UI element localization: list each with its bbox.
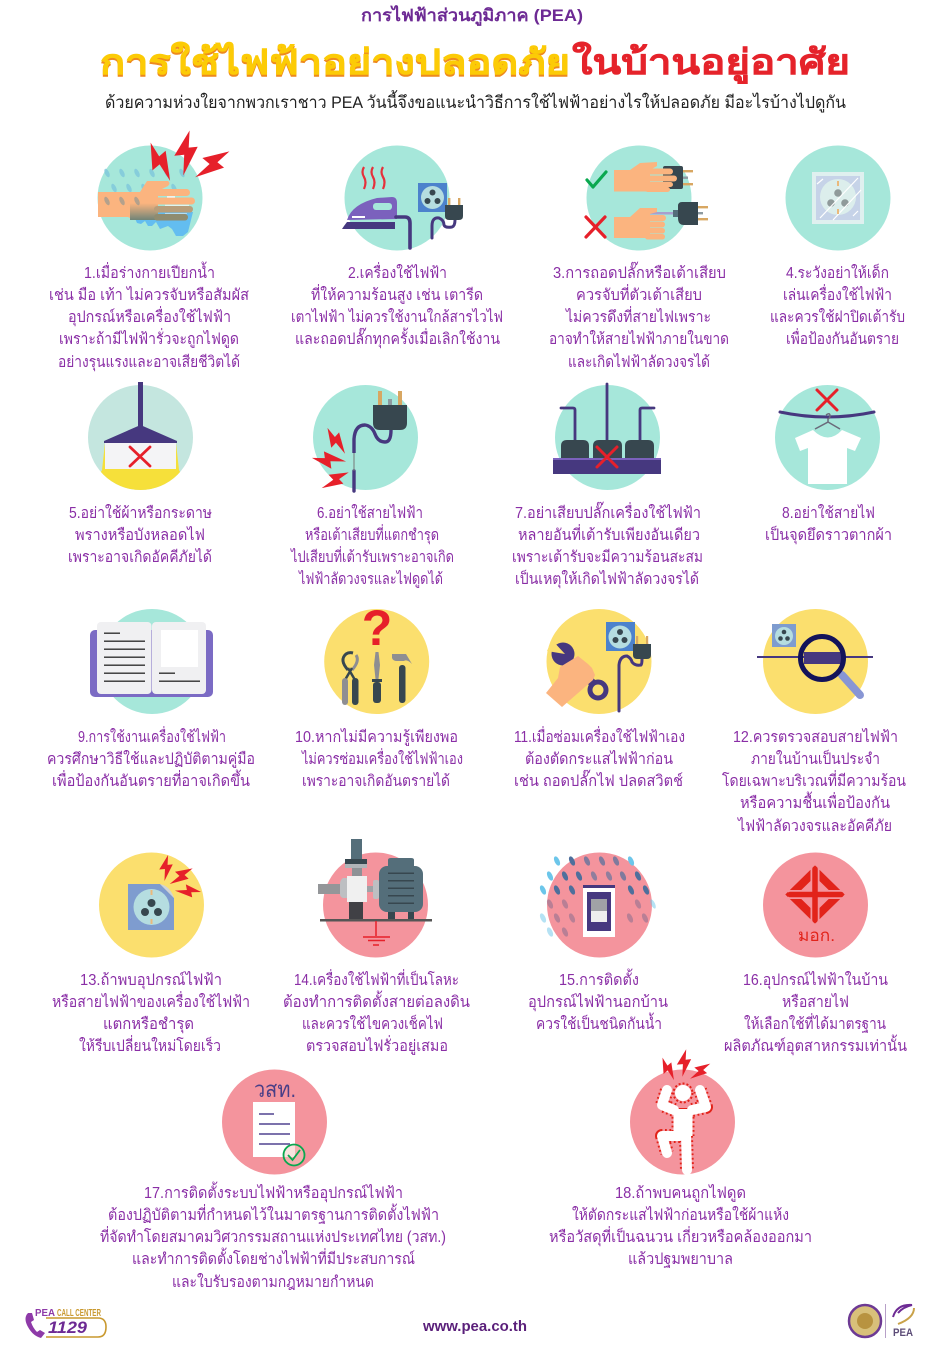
icon: EIT certified document: วสท.: [254, 1077, 296, 1102]
text: item 7: [512, 501, 703, 589]
text: item 17: และใบรับรองตามกฎหมายกำหนด: [172, 1273, 374, 1291]
text: item 16: ให้เลือกใช้ที่ได้มาตรฐาน: [744, 1013, 886, 1033]
text: item 18: หรือวัสดุที่เป็นฉนวน เกี่ยวหรือคล้องออกมา: [549, 1226, 812, 1247]
icon: person being shocked: [630, 1049, 735, 1174]
icon: covered socket: [786, 146, 890, 250]
text: item 12: ภายในบ้านเป็นประจำ: [751, 749, 880, 768]
panel: item 10 tools: [295, 600, 463, 790]
panel: item 14 grounding: [283, 839, 470, 1056]
icon: waterproof switch in rain: [539, 852, 657, 958]
text: item 2: 2.เครื่องใช้ไฟฟ้า: [348, 262, 447, 282]
text: item 14: 14.เครื่องใช้ไฟฟ้าที่เป็นโลหะ: [294, 969, 459, 989]
panel: item 3 unplugging: [549, 146, 729, 371]
text: item 15: อุปกรณ์ไฟฟ้านอกบ้าน: [528, 993, 668, 1012]
icon: wet hand with electric shock: [98, 130, 235, 250]
text: item 7: เป็นเหตุให้เกิดไฟฟ้าลัดวงจรได้: [515, 569, 699, 589]
icon: TIS standard mark: [763, 852, 868, 958]
text: item 4: 4.ระวังอย่าให้เด็ก: [786, 263, 889, 282]
text: item 11: [514, 726, 685, 790]
panel: item 8 clothesline: [765, 385, 892, 545]
text: item 17: [100, 1181, 446, 1291]
text: item 12: ไฟฟ้าลัดวงจรและอัคคีภัย: [736, 817, 892, 835]
text: item 12: หรือความชื้นเพื่อป้องกัน: [740, 791, 890, 812]
icon: shirt hung on electric wire: [775, 385, 880, 490]
panel: item 13 damaged equipment: [52, 852, 250, 1055]
text: item 6: 6.อย่าใช้สายไฟฟ้า: [317, 504, 423, 522]
text: item 4: เพื่อป้องกันอันตราย: [786, 328, 899, 348]
text: item 10: ไม่ควรซ่อมเครื่องใช้ไฟฟ้าเอง: [300, 748, 463, 768]
title: [100, 41, 850, 84]
text: item 7: 7.อย่าเสียบปลั๊กเครื่องใช้ไฟฟ้า: [515, 501, 701, 522]
icon: iron and socket: [342, 146, 463, 250]
text: item 5: [68, 504, 212, 566]
text: item 16: ผลิตภัณฑ์อุตสาหกรรมเท่านั้น: [724, 1034, 907, 1056]
panel: item 15 waterproof: [528, 852, 668, 1033]
icon: power strip with three plugs: [553, 384, 661, 490]
title: การใช้ไฟฟ้าอย่างปลอดภัย: [100, 41, 570, 82]
text: item 15: [528, 968, 668, 1033]
text: item 14: ตรวจสอบไฟรั่วอยู่เสมอ: [306, 1035, 448, 1056]
text: item 15: ควรใช้เป็นชนิดกันน้ำ: [536, 1012, 662, 1033]
icon: damaged cord and plug: [312, 385, 418, 496]
text: item 11: เช่น ถอดปลั๊กไฟ ปลดสวิตช์: [514, 769, 683, 790]
text: item 3: อาจทำให้สายไฟฟ้าภายในขาด: [549, 330, 729, 348]
text: item 2: และถอดปลั๊กทุกครั้งเมื่อเลิกใช้งาน: [295, 327, 500, 349]
text: item 9: 9.การใช้งานเครื่องใช้ไฟฟ้า: [78, 726, 226, 746]
icon: TIS standard mark: มอก.: [798, 926, 835, 945]
text: item 14: [283, 969, 470, 1056]
text: item 2: ที่ให้ความร้อนสูง เช่น เตารีด: [311, 284, 483, 305]
text: item 4: [770, 263, 905, 348]
text: item 3: [549, 261, 729, 371]
icon: covered lamp: [88, 382, 193, 495]
text: item 3: ควรจับที่ตัวเต้าเสียบ: [576, 284, 702, 304]
text: item 5: 5.อย่าใช้ผ้าหรือกระดาษ: [69, 504, 212, 522]
text: item 1: 1.เมื่อร่างกายเปียกน้ำ: [84, 261, 215, 282]
text: item 6: หรือเต้าเสียบที่แตกชำรุด: [305, 524, 439, 545]
panel: item 18 electric shock first aid: [549, 1049, 812, 1268]
text: item 1: เช่น มือ เท้า ไม่ควรจับหรือสัมผัส: [49, 286, 250, 304]
text: item 1: เพราะถ้ามีไฟฟ้ารั่วจะถูกไฟดูด: [59, 328, 239, 349]
text: item 7: เพราะเต้ารับจะมีความร้อนสะสม: [512, 549, 703, 566]
header: organisation name: การไฟฟ้าส่วนภูมิภาค (PEA): [361, 5, 583, 27]
text: item 17: ต้องปฏิบัติตามที่กำหนดไว้ในมาตรฐานการติดตั้งไฟฟ้า: [108, 1203, 439, 1224]
text: item 12: 12.ควรตรวจสอบสายไฟฟ้า: [733, 728, 898, 746]
text: item 8: [765, 504, 892, 545]
icon: grounded water pump: [318, 839, 432, 958]
panel: item 9 manual: [47, 609, 255, 790]
text: item 16: 16.อุปกรณ์ไฟฟ้าในบ้าน: [743, 971, 888, 990]
text: item 17: 17.การติดตั้งระบบไฟฟ้าหรืออุปกรณ์ไฟฟ้า: [144, 1181, 403, 1203]
text: item 9: [47, 726, 255, 790]
panel: item 12 inspection: [722, 609, 906, 835]
text: item 13: หรือสายไฟฟ้าของเครื่องใช้ไฟฟ้า: [52, 991, 250, 1011]
text: item 6: ไปเสียบที่เต้ารับเพราะอาจเกิด: [289, 546, 454, 566]
icon: tools and question mark: ?: [362, 600, 392, 656]
website address: www.pea.co.th: [422, 1318, 527, 1335]
icon: tools and question mark: [324, 600, 429, 714]
subtitle: ด้วยความห่วงใยจากพวกเราชาว PEA วันนี้จึงขอแนะนำวิธีการใช้ไฟฟ้าอย่างไรให้ปลอดภัย มีอะไรบ้างไปดูกัน: [105, 90, 846, 113]
icon: sparking broken socket: [99, 852, 204, 958]
logo: PEA seal and emblem: [849, 1304, 914, 1339]
text: item 14: ต้องทำการติดตั้งสายต่อลงดิน: [283, 990, 470, 1011]
text: item 16: หรือสายไฟ: [782, 993, 849, 1011]
text: item 11: ต้องตัดกระแสไฟฟ้าก่อน: [525, 750, 673, 768]
text: item 17: ที่จัดทำโดยสมาคมวิศวกรรมสถานแห่งประเทศไทย (วสท.): [100, 1226, 446, 1246]
text: item 10: [295, 728, 463, 790]
text: item 18: ให้ตัดกระแสไฟฟ้าก่อนหรือใช้ผ้าแห้ง: [572, 1206, 789, 1224]
icon: EIT certified document: [222, 1070, 327, 1174]
panel: item 7 overloaded socket: [512, 384, 703, 589]
icon: hand with wrench and socket: [546, 609, 652, 714]
panel: item 17 EIT standard: [100, 1070, 446, 1291]
text: item 10: 10.หากไม่มีความรู้เพียงพอ: [295, 728, 458, 747]
text: item 6: ไฟฟ้าลัดวงจรและไฟดูดได้: [297, 570, 443, 589]
panel: item 11 repair: [514, 609, 685, 790]
text: item 17: และทำการติดตั้งโดยช่างไฟฟ้าที่มีประสบการณ์: [132, 1247, 415, 1268]
text: item 1: อุปกรณ์หรือเครื่องใช้ไฟฟ้า: [68, 306, 231, 327]
text: item 1: อย่างรุนแรงและอาจเสียชีวิตได้: [58, 353, 240, 372]
panel: item 5 covered lamp: [68, 382, 212, 566]
panel: item 6 damaged plug: [289, 385, 454, 589]
text: item 7: หลายอันที่เต้ารับเพียงอันเดียว: [518, 524, 700, 544]
logo: PEA call center 1129: [26, 1308, 106, 1338]
text: item 6: [289, 504, 454, 589]
text: item 3: 3.การถอดปลั๊กหรือเต้าเสียบ: [553, 261, 726, 282]
text: item 13: ให้รีบเปลี่ยนใหม่โดยเร็ว: [79, 1035, 221, 1055]
text: item 14: และควรใช้ไขควงเช็คไฟ: [302, 1014, 443, 1033]
panel: item 1 wet body: [49, 130, 250, 372]
icon: magnifier over wire: [757, 609, 873, 714]
text: item 2: [291, 262, 503, 349]
text: item 16: [724, 971, 907, 1056]
text: item 8: 8.อย่าใช้สายไฟ: [782, 504, 875, 522]
text: item 11: 11.เมื่อซ่อมเครื่องใช้ไฟฟ้าเอง: [514, 726, 685, 746]
text: item 10: เพราะอาจเกิดอันตรายได้: [302, 772, 450, 790]
text: item 18: แล้วปฐมพยาบาล: [628, 1251, 733, 1268]
logo: PEA call center 1129: PEA: [35, 1308, 55, 1319]
text: item 4: เล่นเครื่องใช้ไฟฟ้า: [783, 284, 892, 304]
text: item 2: เตาไฟฟ้า ไม่ควรใช้งานใกล้สารไวไฟ: [291, 308, 503, 326]
text: item 12: โดยเฉพาะบริเวณที่มีความร้อน: [722, 770, 906, 790]
text: item 13: 13.ถ้าพบอุปกรณ์ไฟฟ้า: [80, 971, 222, 990]
text: item 9: เพื่อป้องกันอันตรายที่อาจเกิดขึ้น: [52, 769, 250, 790]
logo: PEA call center 1129: 1129: [48, 1318, 88, 1337]
logo: PEA seal and emblem: PEA: [893, 1327, 913, 1339]
text: item 18: [549, 1184, 812, 1268]
title: ในบ้านอยู่อาศัย: [572, 41, 850, 84]
icon: open manual book: [90, 609, 213, 714]
text: item 3: และเกิดไฟฟ้าลัดวงจรได้: [568, 353, 710, 371]
text: item 3: ไม่ควรดึงที่สายไฟเพราะ: [564, 306, 711, 326]
text: item 15: 15.การติดตั้ง: [559, 968, 639, 989]
text: item 18: 18.ถ้าพบคนถูกไฟดูด: [615, 1184, 746, 1203]
text: item 4: และควรใช้ฝาปิดเต้ารับ: [770, 308, 905, 326]
panel: item 2 heat appliance: [291, 146, 503, 349]
logo: PEA call center 1129: CALL CENTER: [57, 1308, 101, 1319]
panel: item 16 TIS standard: [724, 852, 907, 1056]
text: item 8: เป็นจุดยึดราวตากผ้า: [765, 525, 892, 545]
panel: item 4 socket cover: [770, 146, 905, 348]
text: item 13: [52, 971, 250, 1055]
text: item 9: ควรศึกษาวิธีใช้และปฏิบัติตามคู่มือ: [47, 750, 255, 769]
text: item 12: [722, 728, 906, 835]
icon: correct and wrong unplugging: [586, 146, 708, 250]
text: item 5: พรางหรือบังหลอดไฟ: [75, 526, 205, 544]
text: item 1: [49, 261, 250, 372]
text: item 5: เพราะอาจเกิดอัคคีภัยได้: [68, 548, 212, 566]
text: item 13: แตกหรือชำรุด: [103, 1015, 194, 1034]
